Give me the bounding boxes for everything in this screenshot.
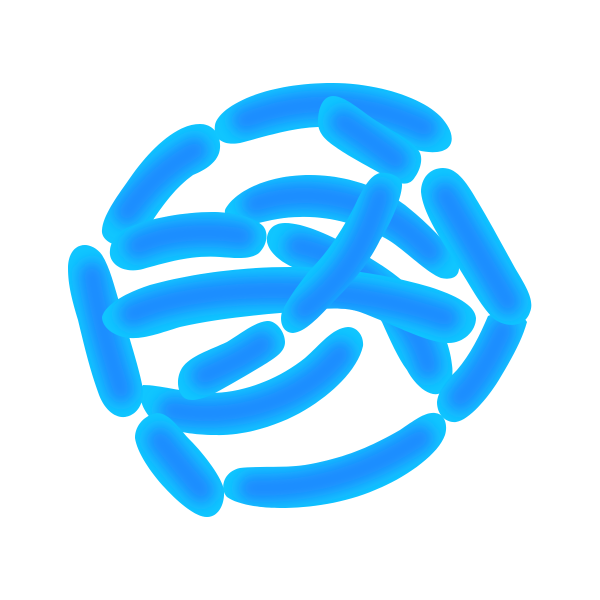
- bacterium: lower right rod: [437, 305, 527, 422]
- bacterium: upper left rod: [102, 124, 220, 246]
- bacterium: middle arc rod: [225, 175, 459, 279]
- bacterium: bottom left short rod: [135, 413, 224, 517]
- bacterium: right long rod: [421, 168, 531, 325]
- bacterium: central diagonal rod: [281, 173, 402, 333]
- bacterium: centre short rod: [178, 321, 285, 400]
- bacterium: left upper horizontal rod: [110, 212, 266, 270]
- illustration: bacteria cluster: [68, 83, 532, 517]
- bacterium: left vertical rod: [68, 245, 143, 417]
- bacterium: upper right short rod: [318, 96, 421, 184]
- bacterium: top long rod: [215, 83, 452, 152]
- bacterium: long horizontal rod: [102, 267, 476, 343]
- bacterium: bottom long rod: [223, 413, 446, 508]
- bacterium: rod behind centre: [267, 223, 452, 394]
- bacterium: lower curved rod: [140, 327, 363, 435]
